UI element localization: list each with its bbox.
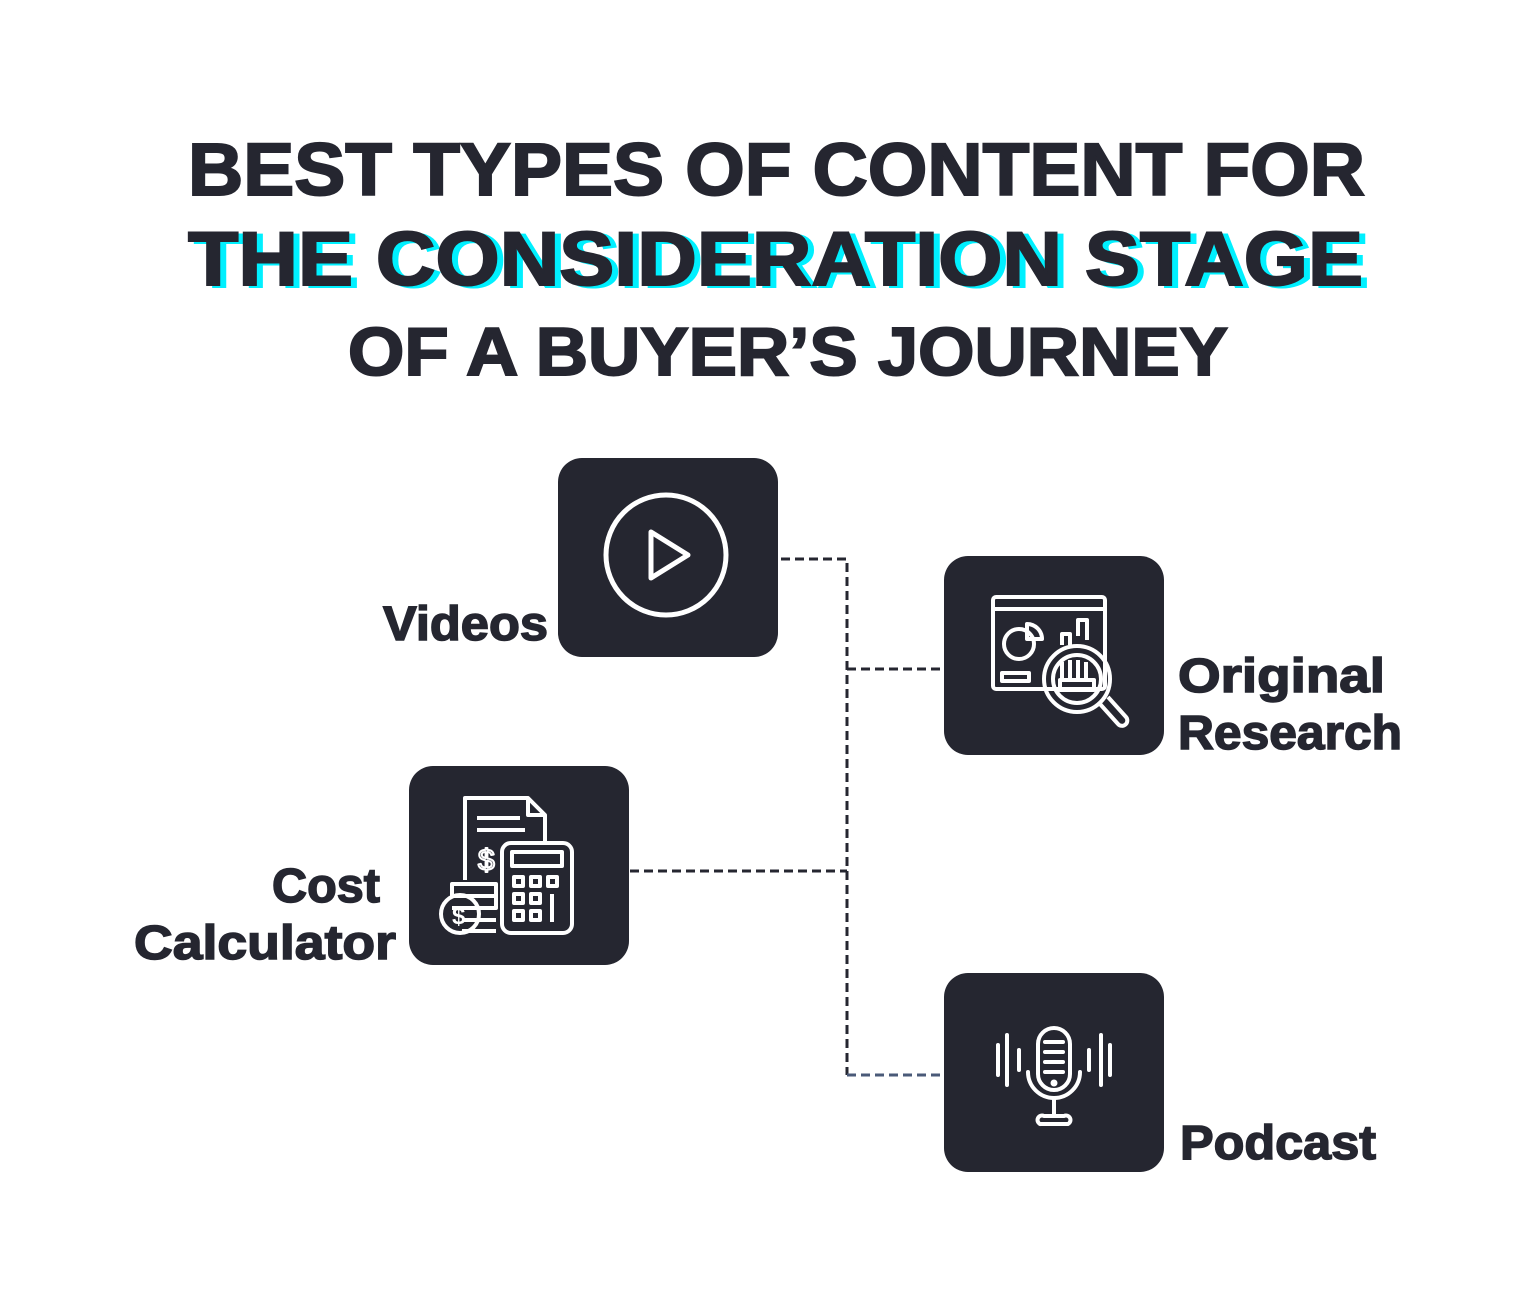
- title: THE CONSIDERATION STAGE: [188, 217, 1363, 302]
- label: cost calculator: Cost: [272, 860, 380, 913]
- label: original research: [1178, 650, 1402, 760]
- panel: original research: [944, 556, 1164, 755]
- icon: play: [606, 495, 726, 615]
- panel: videos: [558, 458, 778, 657]
- label: original research: Original: [1178, 650, 1385, 703]
- icon: microphone: [998, 1028, 1110, 1124]
- icon: calculator: $: [478, 844, 495, 877]
- title: [188, 128, 1369, 390]
- panel: cost calculator: [409, 766, 629, 965]
- title: BEST TYPES OF CONTENT FOR: [188, 128, 1365, 211]
- title: THE CONSIDERATION STAGE: [194, 219, 1369, 304]
- label: cost calculator: [134, 860, 396, 970]
- label: cost calculator: Calculator: [134, 917, 396, 970]
- connector lines: [630, 559, 944, 1075]
- label: videos: Videos: [383, 598, 548, 651]
- label: original research: Research: [1178, 707, 1402, 760]
- icon: research: [993, 597, 1127, 726]
- panel: podcast: [944, 973, 1164, 1172]
- title: OF A BUYER’S JOURNEY: [348, 314, 1228, 390]
- icon: calculator: [441, 798, 572, 933]
- label: podcast: Podcast: [1180, 1117, 1376, 1170]
- icon: calculator: $: [452, 903, 466, 930]
